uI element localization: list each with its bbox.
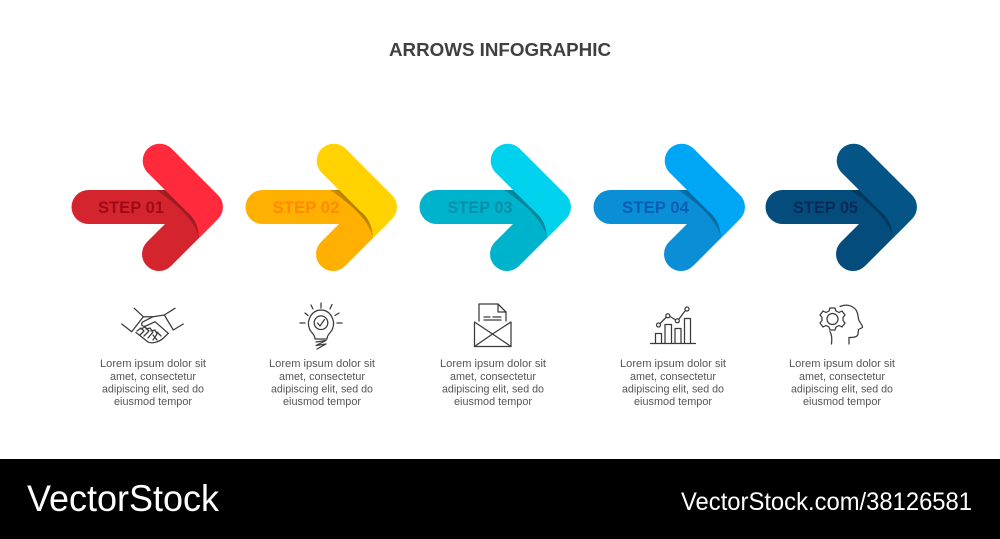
- text: step 04 description: Lorem ipsum dolor sit: [620, 358, 726, 370]
- arrow: step 02: [246, 144, 397, 254]
- arrow: step 03: STEP 03: [448, 198, 512, 217]
- arrow: step 04: [594, 144, 745, 254]
- text: step 02 description: amet, consectetur: [279, 371, 365, 383]
- text: step 02 description: adipiscing elit, sed do: [271, 384, 373, 396]
- text: step 04 description: [620, 358, 726, 408]
- text: step 05 description: amet, consectetur: [799, 371, 885, 383]
- text: step 01 description: adipiscing elit, sed do: [102, 384, 204, 396]
- text: step 03 description: [440, 358, 546, 408]
- arrow: step 02: STEP 02: [272, 198, 340, 217]
- icon: bar chart with line: [650, 307, 696, 344]
- text: step 02 description: [269, 358, 375, 408]
- footer band: [0, 459, 1000, 539]
- text: step 01 description: eiusmod tempor: [114, 396, 192, 408]
- footer url: VectorStock.com/38126581: [681, 488, 972, 516]
- arrow: step 01: [72, 144, 223, 254]
- arrow: step 01: STEP 01: [98, 198, 164, 217]
- arrow: step 05: [766, 144, 917, 254]
- text: step 03 description: adipiscing elit, sed do: [442, 384, 544, 396]
- text: step 05 description: [789, 358, 895, 408]
- text: step 04 description: amet, consectetur: [630, 371, 716, 383]
- arrow: step 05: STEP 05: [793, 198, 858, 217]
- text: step 03 description: eiusmod tempor: [454, 396, 532, 408]
- text: step 02 description: Lorem ipsum dolor sit: [269, 358, 375, 370]
- arrow: step 03: [420, 144, 571, 254]
- text: step 01 description: amet, consectetur: [110, 371, 196, 383]
- text: step 03 description: amet, consectetur: [450, 371, 536, 383]
- text: step 04 description: adipiscing elit, sed do: [622, 384, 724, 396]
- text: step 01 description: [100, 358, 206, 408]
- text: step 03 description: Lorem ipsum dolor sit: [440, 358, 546, 370]
- footer logo: VectorStock: [27, 478, 219, 519]
- text: step 02 description: eiusmod tempor: [283, 396, 361, 408]
- icon: light bulb with check: [300, 303, 342, 349]
- text: step 05 description: eiusmod tempor: [803, 396, 881, 408]
- icon: envelope with document: [474, 304, 511, 346]
- arrow: step 04: STEP 04: [622, 198, 690, 217]
- title: ARROWS INFOGRAPHIC: [389, 39, 611, 60]
- text: step 05 description: adipiscing elit, sed do: [791, 384, 893, 396]
- icon: handshake: [122, 308, 183, 343]
- text: step 04 description: eiusmod tempor: [634, 396, 712, 408]
- text: step 01 description: Lorem ipsum dolor sit: [100, 358, 206, 370]
- icon: head with gear: [820, 305, 863, 344]
- text: step 05 description: Lorem ipsum dolor sit: [789, 358, 895, 370]
